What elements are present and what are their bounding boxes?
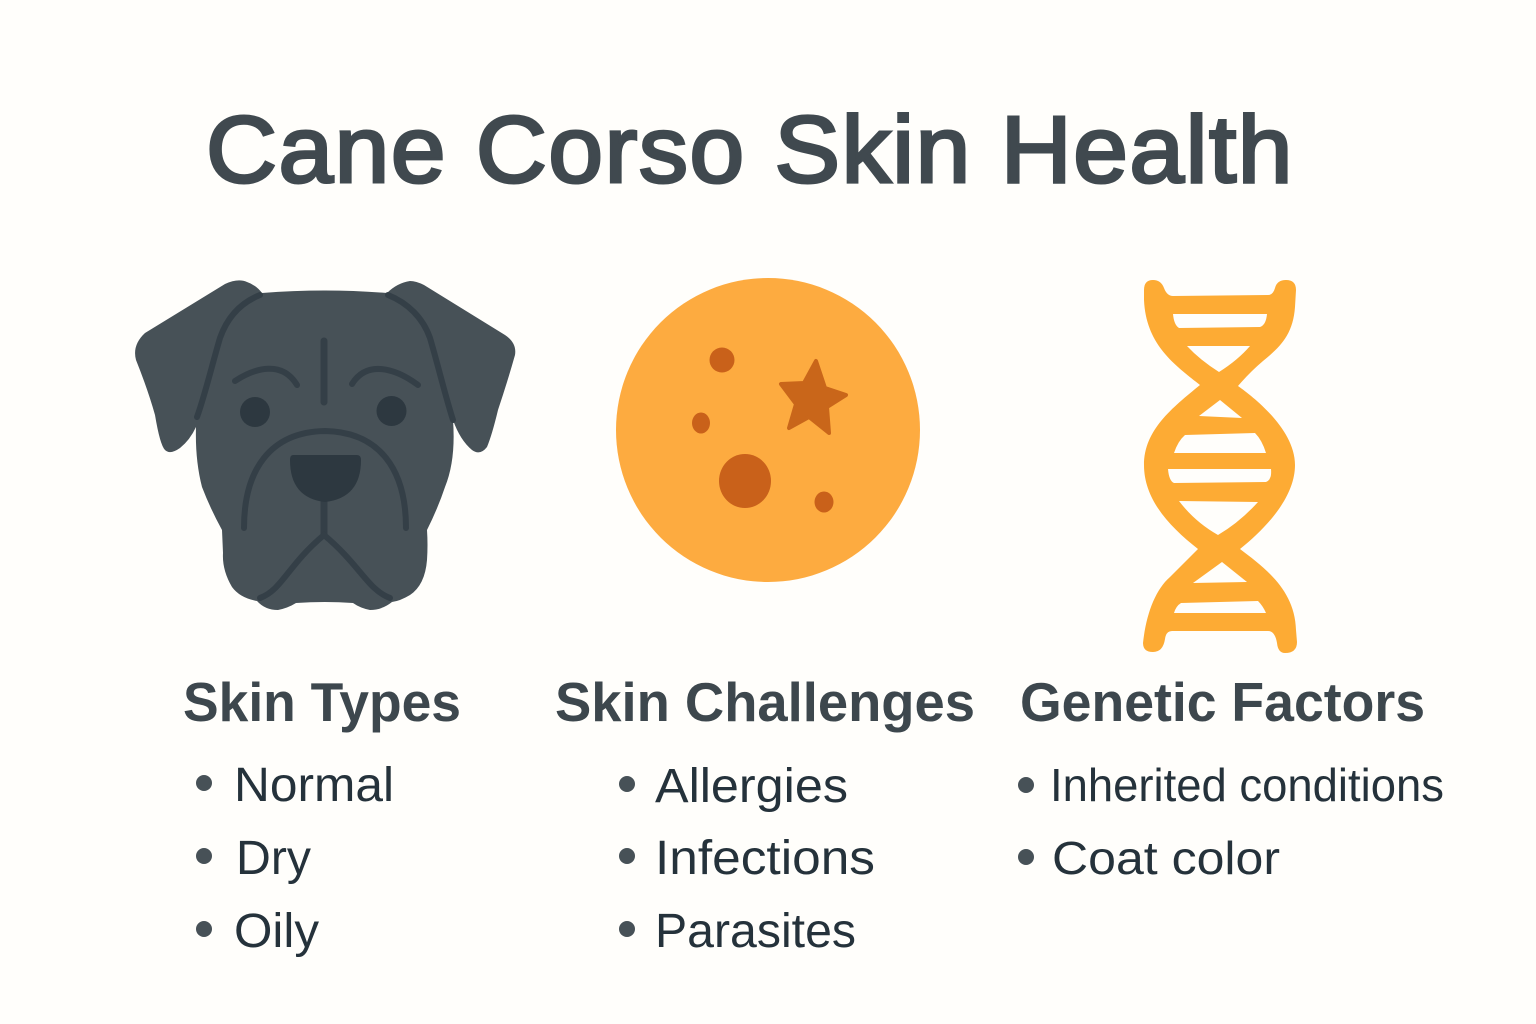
list: skin challenges: Parasites <box>655 905 856 958</box>
list: genetic factors: Coat color <box>1052 832 1280 884</box>
list: skin challenges: Infections <box>655 832 875 885</box>
list: genetic factors: Inherited conditions <box>1050 759 1444 811</box>
list: skin challenges <box>619 760 875 958</box>
list: skin types <box>196 759 394 958</box>
icon: skin circle with lesions <box>616 278 920 582</box>
list: skin types: Dry <box>236 832 311 885</box>
title: Cane Corso Skin Health <box>206 97 1294 203</box>
list: skin types: Oily <box>234 905 319 958</box>
heading: Skin Challenges: Skin Challenges <box>555 671 975 733</box>
icon: dog face <box>135 280 515 610</box>
icon: DNA helix <box>1143 280 1297 653</box>
heading: Skin Types: Skin Types <box>183 671 461 733</box>
list: skin types: Normal <box>234 759 394 812</box>
heading: Genetic Factors: Genetic Factors <box>1020 671 1425 733</box>
list: skin challenges: Allergies <box>655 760 848 813</box>
list: genetic factors <box>1018 759 1444 884</box>
